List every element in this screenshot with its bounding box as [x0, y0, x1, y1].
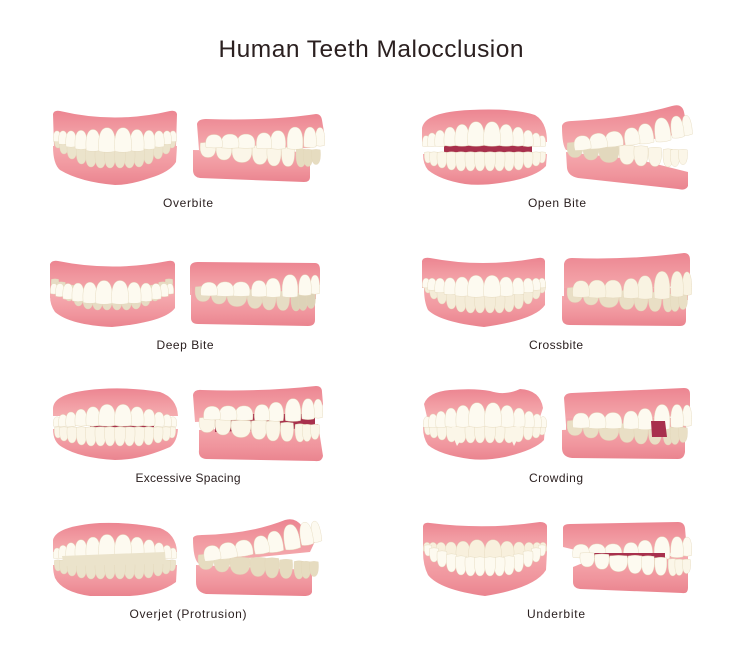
crowding gap	[651, 421, 667, 437]
front view: deep bite	[50, 261, 175, 327]
front view: open bite	[422, 110, 547, 185]
label: overjet: Overjet (Protrusion)	[130, 607, 246, 621]
panel: open bite	[422, 105, 693, 210]
side view: crowding	[562, 388, 692, 459]
side view: open bite	[562, 105, 693, 190]
side view: crossbite	[562, 253, 692, 326]
panel: deep bite	[50, 261, 320, 352]
front view: overjet	[53, 523, 177, 596]
side view: underbite	[563, 522, 692, 593]
label: deep bite: Deep Bite	[156, 338, 214, 352]
label: crowding: Crowding	[529, 471, 583, 485]
side view: excessive spacing	[193, 386, 323, 461]
label: underbite: Underbite	[527, 607, 585, 621]
title: Human Teeth Malocclusion	[218, 36, 524, 63]
front view: underbite	[423, 522, 547, 596]
label: open bite: Open Bite	[528, 196, 586, 210]
panel: crossbite	[422, 253, 692, 352]
front view: crossbite	[422, 258, 546, 327]
label: overbite: Overbite	[163, 196, 213, 210]
panel: underbite	[423, 522, 692, 621]
panel: crowding	[423, 388, 692, 485]
panel: overjet	[53, 519, 323, 621]
front view: excessive spacing	[53, 388, 178, 460]
front view: crowding	[423, 389, 547, 460]
label: crossbite: Crossbite	[529, 338, 583, 352]
icon: crooked canines	[452, 426, 520, 446]
label: excessive spacing: Excessive Spacing	[136, 471, 240, 485]
dark bite line	[586, 553, 665, 558]
side view: deep bite	[190, 262, 320, 326]
panel: overbite	[53, 111, 325, 210]
panel: excessive spacing	[53, 386, 323, 485]
side view: overbite	[193, 114, 325, 182]
front view: overbite	[53, 111, 177, 185]
side view: overjet	[193, 519, 323, 596]
